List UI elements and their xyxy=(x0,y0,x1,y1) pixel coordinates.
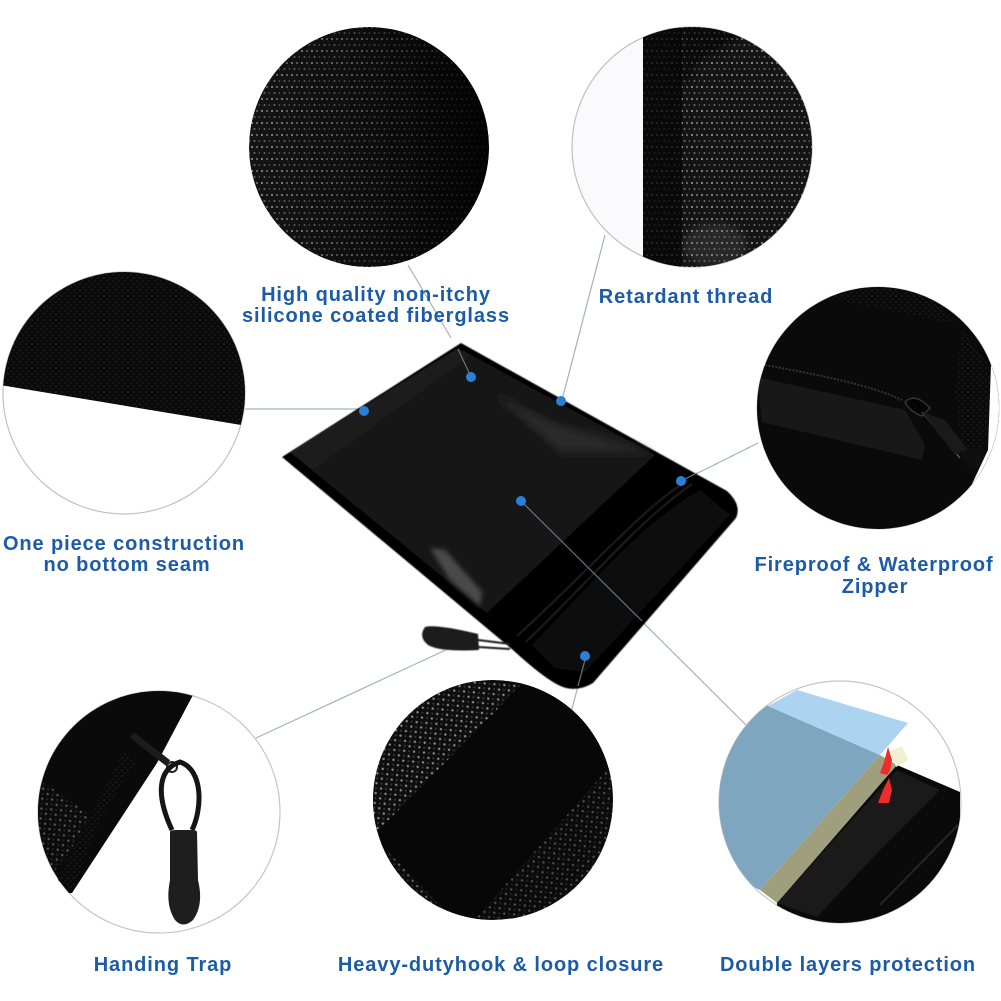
label: zipper line 2: Zipper xyxy=(842,576,908,598)
panel: double layers circle xyxy=(700,681,961,923)
label: closure: Heavy-dutyhook & loop closure xyxy=(338,954,664,976)
label: silicone line 2: silicone coated fiberglass xyxy=(242,305,510,327)
label: handing trap: Handing Trap xyxy=(94,954,232,976)
connector lines xyxy=(245,235,758,738)
label: one piece line 2: no bottom seam xyxy=(43,554,211,576)
panel: handing trap circle xyxy=(30,680,280,933)
label: silicone: High quality non-itchy xyxy=(261,284,491,306)
label: one piece: One piece construction xyxy=(3,533,245,555)
label: double layers: Double layers protection xyxy=(720,954,976,976)
panel: silicone fabric circle xyxy=(249,27,489,267)
label: retardant thread: Retardant thread xyxy=(599,286,773,308)
callout dots xyxy=(359,372,686,661)
label: zipper: Fireproof & Waterproof xyxy=(754,554,994,576)
panel: hook and loop closure circle xyxy=(360,680,620,920)
lines over bag xyxy=(458,349,697,686)
panel: zipper circle xyxy=(750,280,1001,540)
icon: red arrows xyxy=(878,747,892,803)
zipper pull xyxy=(422,626,479,650)
product: fireproof bag xyxy=(282,343,738,689)
panel: one piece construction circle xyxy=(0,260,247,514)
panel: retardant thread circle xyxy=(571,26,813,268)
